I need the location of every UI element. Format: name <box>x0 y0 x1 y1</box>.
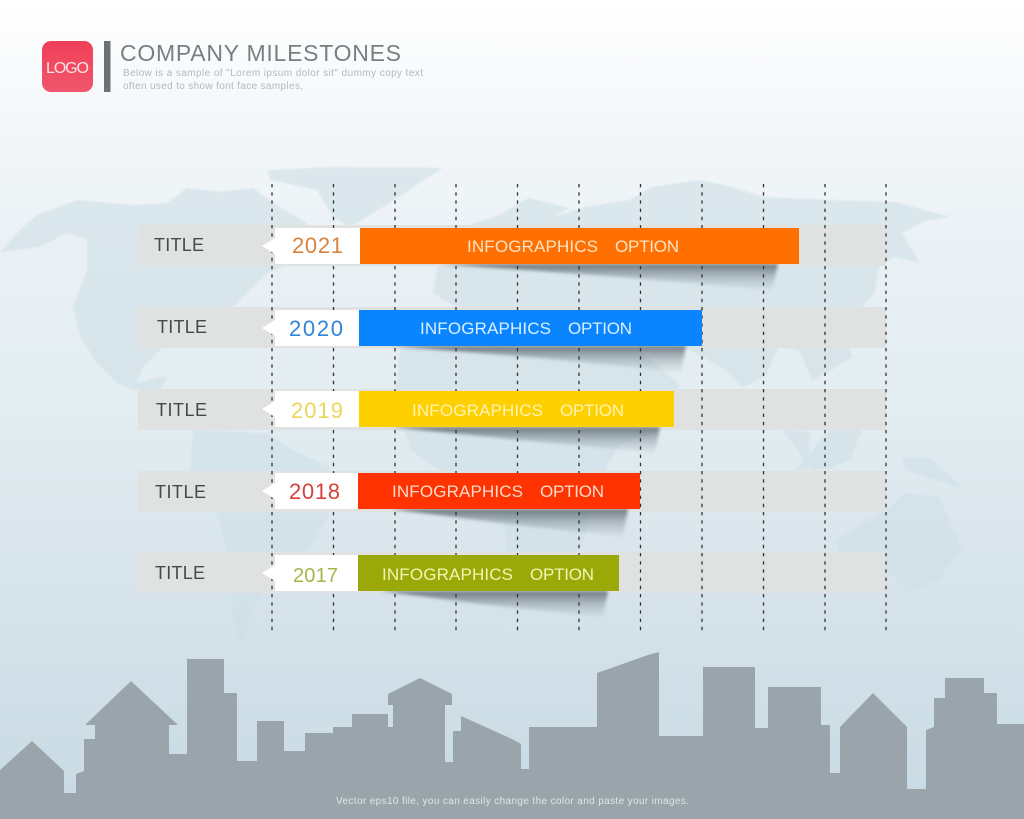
title label: TITLE <box>155 563 205 583</box>
red bar: INFOGRAPHICS <box>392 482 523 501</box>
blue bar: INFOGRAPHICS <box>420 319 551 338</box>
band 2019 <box>138 389 886 430</box>
year tag: 2017 <box>293 565 338 587</box>
yellow bar: OPTION <box>560 401 624 420</box>
orange bar: INFOGRAPHICS <box>467 237 598 256</box>
indonesia islands <box>902 457 965 490</box>
subtitle: Below is a sample of "Lorem ipsum dolor sit" dummy copy text <box>123 68 423 79</box>
shadow 2019 <box>390 427 660 453</box>
year tag <box>262 391 359 427</box>
north america <box>0 188 307 390</box>
bar shadows <box>380 264 778 617</box>
red bar <box>358 473 640 509</box>
band 2018 <box>138 471 886 512</box>
title label: TITLE <box>154 235 204 255</box>
year tag <box>262 555 358 591</box>
title label: TITLE <box>156 400 207 420</box>
year tag: 2018 <box>289 479 340 504</box>
year tag: 2020 <box>289 316 343 341</box>
band 2020 <box>138 307 886 348</box>
year tag: 2021 <box>292 233 343 258</box>
title: COMPANY MILESTONES <box>120 40 401 66</box>
greenland <box>267 167 443 227</box>
yellow bar: INFOGRAPHICS <box>412 401 543 420</box>
world map <box>0 167 965 650</box>
olive bar: OPTION <box>530 565 594 584</box>
row background bands <box>138 225 886 593</box>
orange bar <box>360 228 799 264</box>
title label: TITLE <box>155 482 206 502</box>
row: 2021 <box>154 228 799 264</box>
yellow bar <box>359 391 674 427</box>
footer note: Vector eps10 file, you can easily change the color and paste your images. <box>336 796 689 807</box>
shadow 2017 <box>380 591 608 617</box>
row: 2020 <box>157 310 702 346</box>
header <box>42 40 423 92</box>
blue bar: OPTION <box>568 319 632 338</box>
year tag <box>262 473 358 509</box>
city skyline silhouette <box>0 652 1024 819</box>
olive bar <box>358 555 619 591</box>
eurasia <box>433 180 950 387</box>
blue bar <box>359 310 702 346</box>
red bar: OPTION <box>540 482 604 501</box>
row: 2018 <box>155 473 640 509</box>
icon: logo badge <box>42 41 93 92</box>
australia <box>835 493 962 593</box>
shadow 2020 <box>390 346 686 372</box>
header divider bar <box>104 41 110 92</box>
year tag: 2019 <box>291 398 343 423</box>
band 2021 <box>138 225 886 266</box>
row: 2019 <box>156 391 674 427</box>
shadow 2021 <box>440 264 778 290</box>
subtitle: often used to show font face samples, <box>123 81 303 92</box>
year tag <box>262 228 360 264</box>
row: 2017 <box>155 555 619 591</box>
subtitle <box>123 68 423 92</box>
title label: TITLE <box>157 317 207 337</box>
shadow 2018 <box>390 509 628 537</box>
orange bar: OPTION <box>615 237 679 256</box>
year tag <box>262 310 359 346</box>
south america <box>190 430 330 650</box>
olive bar: INFOGRAPHICS <box>382 565 513 584</box>
icon: logo badge: LOGO <box>46 60 89 77</box>
india and south east asia <box>782 430 862 470</box>
africa <box>395 312 680 600</box>
band 2017 <box>138 552 886 593</box>
dashed timeline grid <box>272 184 886 632</box>
